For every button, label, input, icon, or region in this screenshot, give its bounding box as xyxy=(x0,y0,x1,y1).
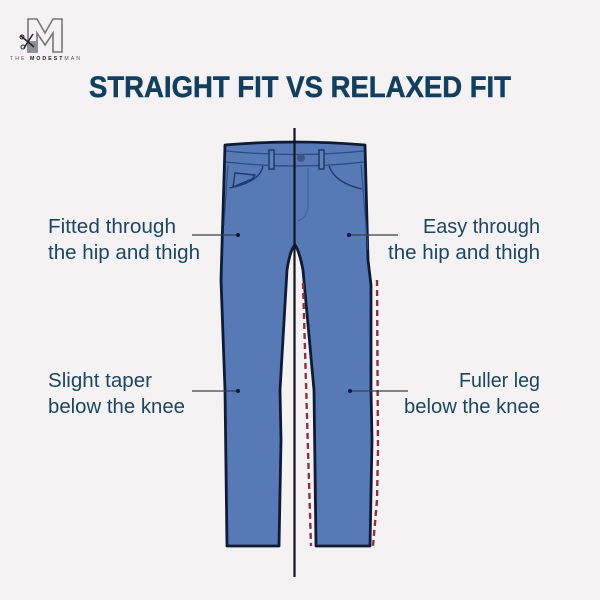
left pocket with coin pocket xyxy=(229,166,263,188)
button xyxy=(297,154,305,162)
label: below knee, straight: Slight taper xyxy=(48,370,152,392)
label: below knee, straight: below the knee xyxy=(48,396,185,418)
side seams xyxy=(224,165,368,250)
label: below knee, relaxed: Fuller leg xyxy=(459,370,540,392)
icon: M ruler monogram xyxy=(20,19,62,52)
belt loops xyxy=(269,150,324,169)
label: below knee, straight xyxy=(48,370,185,418)
center divider line xyxy=(293,128,296,577)
label: hip and thigh, straight xyxy=(48,216,200,264)
title: STRAIGHT FIT VS RELAXED FIT xyxy=(89,71,511,104)
waistband xyxy=(226,151,364,166)
label: hip and thigh, straight: Fitted through xyxy=(48,216,176,238)
pointer: right knee xyxy=(348,389,408,393)
label: hip and thigh, relaxed: the hip and thigh xyxy=(388,242,540,264)
label: hip and thigh, relaxed xyxy=(388,216,540,264)
jeans illustration xyxy=(221,142,372,546)
label: hip and thigh, straight: the hip and thigh xyxy=(48,242,200,264)
fly stitching xyxy=(297,168,308,221)
label: hip and thigh, relaxed: Easy through xyxy=(423,216,540,238)
dashed outline: relaxed fit outer leg xyxy=(373,280,378,546)
pointer: left hip xyxy=(192,233,240,237)
label: below knee, relaxed xyxy=(404,370,540,418)
label: below knee, relaxed: below the knee xyxy=(404,396,540,418)
jeans body xyxy=(221,142,372,546)
logo wordmark: THE MODEST MAN xyxy=(10,56,80,62)
pointer: right hip xyxy=(347,233,398,237)
dashed outline: relaxed fit inner leg xyxy=(303,283,311,546)
pointer: left knee xyxy=(192,389,240,393)
logo: The Modest Man xyxy=(10,19,80,62)
right pocket xyxy=(329,166,362,189)
